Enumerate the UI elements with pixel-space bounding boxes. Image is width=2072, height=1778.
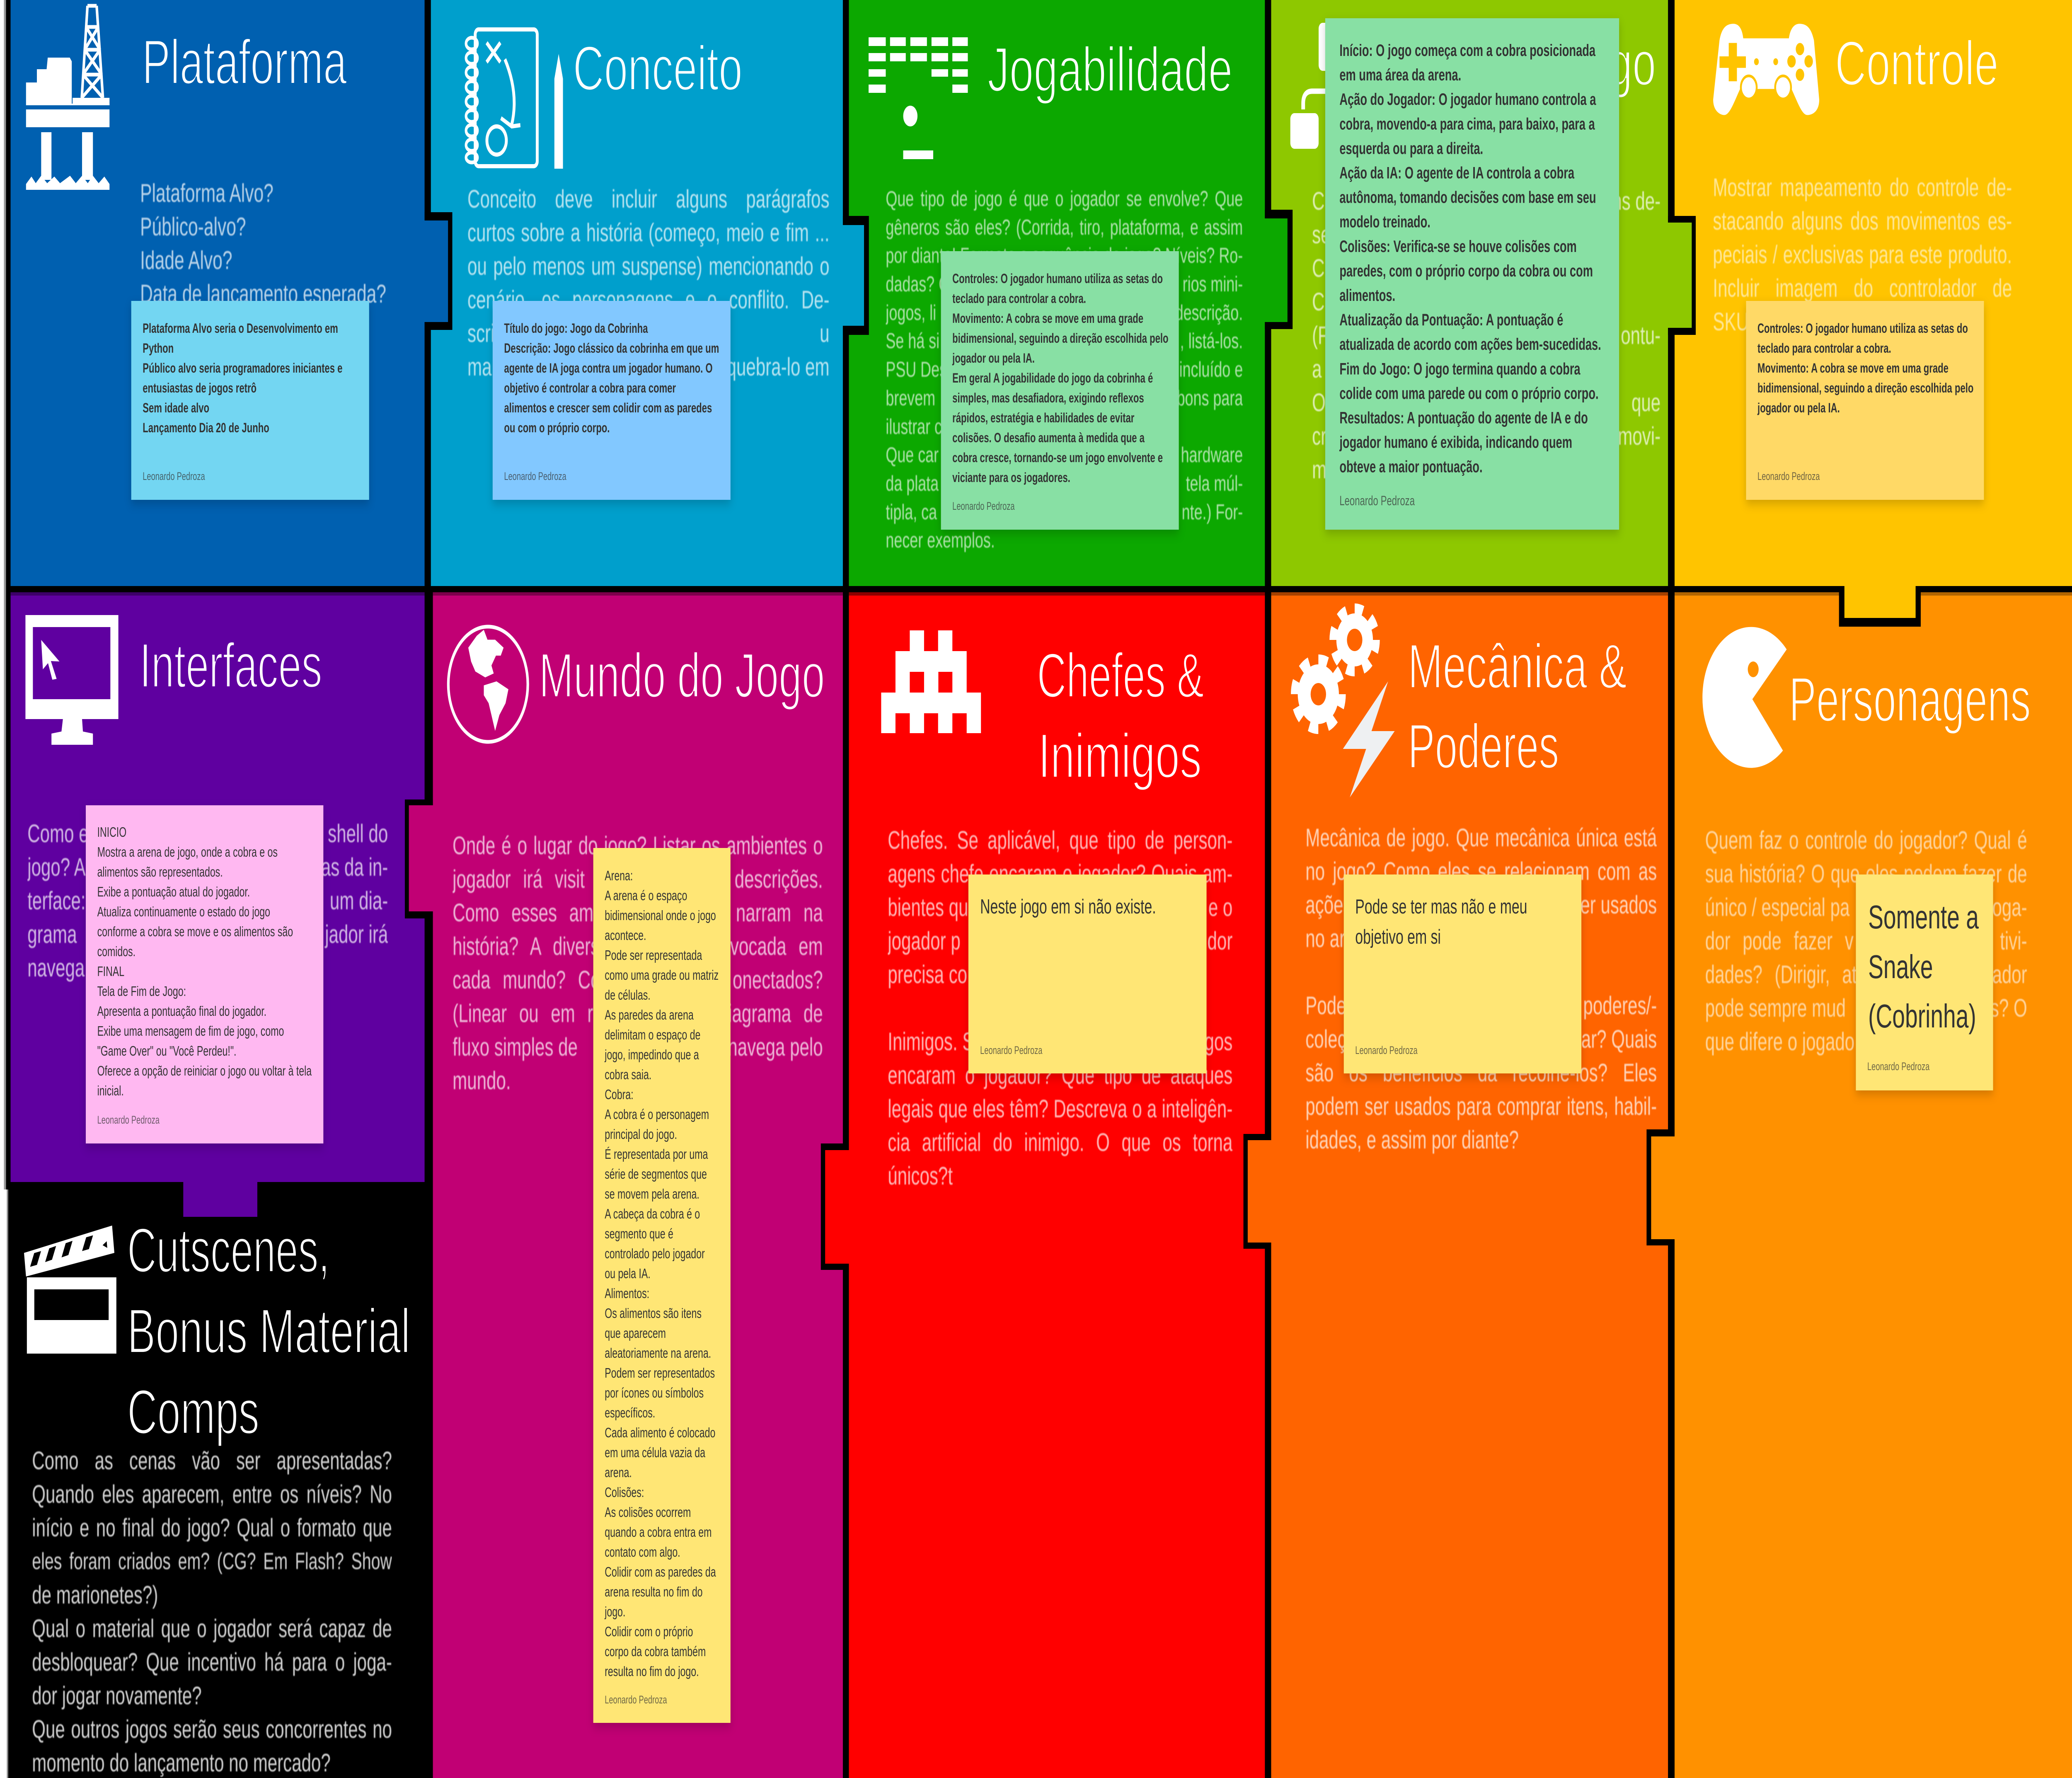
note: Fluxo do Jogo: colide com uma parede ou com o próprio corpo. <box>1339 384 1599 403</box>
note: Plataforma: entusiastas de jogos retrô <box>143 380 257 395</box>
note: Interfaces: Atualiza continuamente o estado do jogo <box>97 904 270 920</box>
text block: Chefes & Inimigos questions: gos <box>1204 1027 1232 1056</box>
text block: Controle instructions: peciais / exclusivas para este produto. <box>1713 240 2012 269</box>
text block: Mundo do Jogo questions: narram na <box>736 899 823 927</box>
text block: Personagens questions: oga- <box>1992 893 2027 921</box>
text block: Jogabilidade questions: da plata <box>886 472 939 496</box>
text block: Interfaces questions <box>27 817 388 991</box>
text block: Conceito instructions: scri <box>467 319 495 347</box>
text block: Controle instructions <box>1713 171 2012 345</box>
note: Mundo do Jogo: Podem ser representados <box>605 1366 715 1381</box>
text block: Interfaces questions: terface: <box>27 887 86 915</box>
note: Mundo do Jogo: contato com algo. <box>605 1545 680 1560</box>
text block: Conceito instructions <box>467 182 830 390</box>
text block: Chefes & Inimigos questions: Inimigos. S <box>888 1027 974 1056</box>
note: Conceito: Título do jogo: Jogo da Cobrinha <box>504 321 648 336</box>
heading: Mundo do Jogo: Mundo do Jogo <box>539 640 825 711</box>
note: Interfaces <box>86 805 323 1143</box>
note: Conceito: ou com o próprio corpo. <box>504 420 610 435</box>
note: Mundo do Jogo: aleatoriamente na arena. <box>605 1346 711 1361</box>
note: Fluxo do Jogo <box>1325 18 1619 530</box>
text block: Mecânica & Poderes questions: no ar <box>1305 924 1345 952</box>
text block: Jogabilidade questions: bons para <box>1177 386 1243 410</box>
heading: Cutscenes: Cutscenes, <box>127 1215 330 1286</box>
text block: Mecânica & Poderes questions: Mecânica de jogo. Que mecânica única está <box>1305 824 1657 852</box>
note: Mundo do Jogo: As colisões ocorrem <box>605 1505 691 1520</box>
note: Conceito: Descrição: Jogo clássico da cobrinha em que um <box>504 341 719 356</box>
panel: Cutscenes, Bonus Material, Comps <box>8 1182 433 1778</box>
text block: Interfaces questions: jador irá <box>325 920 388 948</box>
note: Mundo do Jogo: corpo da cobra também <box>605 1644 706 1659</box>
panel: Fluxo do Jogo <box>1271 0 1696 586</box>
note: Interfaces: INICIO <box>97 825 126 840</box>
text block: Cutscenes questions: Que outros jogos serão seus concorrentes no <box>32 1715 392 1743</box>
text block: Fluxo do Jogo visible fragments: a <box>1312 355 1322 383</box>
text block: Fluxo do Jogo visible fragments: m <box>1312 455 1326 484</box>
text block: Chefes & Inimigos questions: únicos?t <box>888 1162 953 1190</box>
text block: Chefes & Inimigos questions: legais que eles têm? Descreva o a inteligên- <box>888 1095 1232 1123</box>
heading: Cutscenes <box>127 1215 410 1447</box>
note: Fluxo do Jogo: Fim do Jogo: O jogo termina quando a cobra <box>1339 360 1581 378</box>
text block: Mundo do Jogo questions: descrições. <box>735 865 823 893</box>
text block: Personagens questions: s? O <box>1990 994 2027 1022</box>
note: Mundo do Jogo: Cada alimento é colocado <box>605 1425 715 1441</box>
text block: Cutscenes questions: Como as cenas vão ser apresentadas? <box>32 1446 392 1475</box>
note: Mundo do Jogo: se movem pela arena. <box>605 1187 700 1202</box>
note: Interfaces: conforme a cobra se move e os alimentos são <box>97 924 293 940</box>
text block: Jogabilidade questions: rios mini- <box>1183 272 1243 296</box>
heading: Personagens: Personagens <box>1789 664 2031 735</box>
note: Conceito: objetivo é controlar a cobra para comer <box>504 380 676 395</box>
text block: Mundo do Jogo questions: navega pelo <box>728 1033 823 1061</box>
note: Fluxo do Jogo: cobra, movendo-a para cima, para baixo, para a <box>1339 115 1595 133</box>
text block: Jogabilidade questions: nte.) For- <box>1182 500 1243 524</box>
text block: Interfaces questions: shell do <box>328 819 388 848</box>
note: Interfaces: Exibe uma mensagem de fim de jogo, como <box>97 1024 284 1039</box>
text block: Jogabilidade questions: necer exemplos. <box>886 528 995 552</box>
text block: Personagens questions: ador <box>1992 960 2027 988</box>
icon: pac-man <box>1702 627 1786 768</box>
text block: Jogabilidade questions: por diante! Formato e sequência do jogo? Níveis? Ro- <box>886 244 1243 268</box>
note: Jogabilidade: teclado para controlar a cobra. <box>952 291 1086 306</box>
text block: Controle instructions: Mostrar mapeamento do controle de- <box>1713 173 2012 201</box>
note: Jogabilidade: Controles: O jogador humano utiliza as setas do <box>952 271 1163 286</box>
note: Fluxo do Jogo: alimentos. <box>1339 286 1395 305</box>
text block: Cutscenes questions: dor jogar novamente? <box>32 1681 202 1710</box>
note: Mundo do Jogo: A arena é o espaço <box>605 888 687 904</box>
text block: Mecânica & Poderes questions: Pode <box>1305 991 1346 1020</box>
text block: Cutscenes questions: eles foram criados em? (CG? Em Flash? Show <box>32 1548 392 1575</box>
note: Jogabilidade: bidimensional, seguindo a direção escolhida pelo <box>952 331 1168 346</box>
note: Mundo do Jogo: acontece. <box>605 928 646 943</box>
text block: Jogabilidade questions: Se há si <box>886 329 939 353</box>
note: Personagens: Somente a <box>1868 899 1979 935</box>
heading: Chefes & Inimigos: Inimigos <box>1038 721 1202 791</box>
note: Conceito: agente de IA joga contra um jogador humano. O <box>504 361 713 375</box>
text block: Mundo do Jogo questions: história? A divers <box>453 932 599 960</box>
text block: Conceito instructions: ou pelo menos um suspense) mencionando o <box>467 252 830 280</box>
text block: Chefes & Inimigos questions: jogador p <box>888 927 961 955</box>
note: Mundo do Jogo: Arena: <box>605 868 633 884</box>
text block: Cutscenes questions: momento do lançamento no mercado? <box>32 1749 331 1777</box>
text block: Cutscenes questions: Qual o material que o jogador será capaz de <box>32 1614 392 1642</box>
text block: Mundo do Jogo questions: Como esses am <box>453 899 593 927</box>
text block: Jogabilidade questions: ilustrar c <box>886 414 942 438</box>
note: Controle: Movimento: A cobra se move em uma grade <box>1757 361 1949 375</box>
text block: Mecânica & Poderes questions: no jogo? Como eles se relacionam com as <box>1305 857 1657 885</box>
panel: Mundo do Jogo <box>405 592 843 1778</box>
note: Interfaces: comidos. <box>97 944 136 959</box>
text block: Plataforma questions: Data de lançamento esperada? <box>140 280 386 308</box>
panel: Conceito <box>431 0 869 586</box>
note: Mundo do Jogo: segmento que é <box>605 1226 673 1242</box>
text block: Interfaces questions: as da in- <box>321 853 388 881</box>
note: Fluxo do Jogo: modelo treinado. <box>1339 213 1431 231</box>
note: Plataforma: Sem idade alvo <box>143 400 209 415</box>
heading: Mecânica & Poderes: Poderes <box>1408 711 1559 782</box>
text block: Mecânica & Poderes questions: tar? Quais <box>1576 1025 1657 1053</box>
note: Jogabilidade: rápidos, estratégia e habilidades de evitar <box>952 410 1135 425</box>
text block: Mecânica & Poderes questions: podem ser usados para comprar itens, habil- <box>1305 1092 1657 1120</box>
text block: Cutscenes questions: início e no final do jogo? Qual o formato que <box>32 1514 392 1542</box>
panel: Personagens <box>1646 592 2072 1778</box>
heading: Chefes & Inimigos: Chefes & <box>1037 640 1204 711</box>
text block: Controle instructions: Incluir imagem do controlador de <box>1713 274 2012 302</box>
note: Mundo do Jogo: arena resulta no fim do <box>605 1584 703 1600</box>
text block: Chefes & Inimigos questions: cia artificial do inimigo. O que os torna <box>888 1128 1232 1156</box>
note: Mundo do Jogo: por ícones ou símbolos <box>605 1386 704 1401</box>
text block: Jogabilidade questions: Que tipo de jogo é que o jogador se envolve? Que <box>886 187 1243 211</box>
text block: Mundo do Jogo questions: (Linear ou em re <box>453 999 603 1027</box>
note: Fluxo do Jogo: Atualização da Pontuação: A pontuação é <box>1339 311 1563 329</box>
text block: Fluxo do Jogo visible fragments: (F <box>1312 321 1329 349</box>
note: Personagens: (Cobrinha) <box>1868 998 1976 1034</box>
note: Mecânica & Poderes: Leonardo Pedroza <box>1355 1044 1418 1056</box>
text block: Mundo do Jogo questions: onectados? <box>733 966 823 994</box>
text block: Interfaces questions: jogo? A <box>27 853 86 881</box>
text block: Personagens questions: dades? (Dirigir, at <box>1705 960 1857 988</box>
note: Mundo do Jogo: de células. <box>605 988 651 1003</box>
note: Controle: Controles: O jogador humano utiliza as setas do <box>1757 321 1968 336</box>
text block: Fluxo do Jogo visible fragments: ns de- <box>1612 187 1661 215</box>
note: Interfaces: alimentos são representados. <box>97 865 223 880</box>
icon: gears and lightning bolt <box>1295 609 1395 797</box>
text block: Jogabilidade questions: descrição. <box>1175 301 1243 325</box>
note: Fluxo do Jogo: Início: O jogo começa com a cobra posicionada <box>1339 41 1596 60</box>
text block: Personagens questions: único / especial pa <box>1705 893 1849 921</box>
text block: Chefes & Inimigos questions: e o <box>1208 893 1232 921</box>
note: Mundo do Jogo: jogo. <box>604 1604 625 1620</box>
text block: Plataforma questions <box>140 177 414 317</box>
note: Mundo do Jogo: resulta no fim do jogo. <box>605 1664 699 1679</box>
text block: Mecânica & Poderes questions: são os benefícios da recolhê-los? Eles <box>1305 1059 1657 1087</box>
note: Fluxo do Jogo: jogador humano é exibida, indicando quem <box>1339 434 1572 452</box>
text block: Plataforma questions: Plataforma Alvo? <box>140 179 274 208</box>
heading: Controle: Controle <box>1835 28 1999 99</box>
note: Chefes & Inimigos: Neste jogo em si não existe. <box>980 895 1156 918</box>
text block: Jogabilidade questions: incluído e <box>1179 358 1243 382</box>
panel: Plataforma <box>11 0 452 586</box>
text block: Personagens questions: Quem faz o controle do jogador? Qual é <box>1705 826 2027 854</box>
heading: Cutscenes: Bonus Material <box>127 1296 410 1366</box>
panel: Controle <box>1675 0 2072 627</box>
note: Mundo do Jogo: Leonardo Pedroza <box>605 1693 667 1706</box>
text block: Mecânica & Poderes questions <box>1305 821 1657 1161</box>
icon: monitor with cursor <box>25 615 119 745</box>
note: Mecânica & Poderes: objetivo em si <box>1355 925 1441 948</box>
text block: Jogabilidade questions <box>886 185 1243 558</box>
text block: Mundo do Jogo questions: vocada em <box>730 932 823 960</box>
text block: Jogabilidade questions: brevem <box>886 386 935 410</box>
note: Controle: teclado para controlar a cobra. <box>1757 341 1891 356</box>
note: Conceito <box>493 301 731 500</box>
note: Plataforma: Lançamento Dia 20 de Junho <box>143 420 269 435</box>
text block: Mundo do Jogo questions: cada mundo? Co <box>453 966 600 994</box>
note: Mundo do Jogo: Colidir com as paredes da <box>605 1565 716 1580</box>
text block: Jogabilidade questions: dadas? C <box>886 272 949 296</box>
panel: Interfaces <box>11 592 425 1217</box>
note: Interfaces: "Game Over" ou "Você Perdeu!". <box>97 1044 236 1059</box>
note: Fluxo do Jogo: esquerda ou para a direita. <box>1339 139 1483 158</box>
icon: clapperboard <box>24 1226 116 1354</box>
note: Mundo do Jogo: delimitam o espaço de <box>605 1027 700 1043</box>
note: Mecânica & Poderes <box>1344 874 1581 1073</box>
note: Jogabilidade: Movimento: A cobra se move em uma grade <box>952 311 1143 326</box>
text block: Personagens questions: pode sempre mud <box>1705 994 1846 1022</box>
panel: Chefes & Inimigos <box>821 592 1265 1778</box>
text block: Mecânica & Poderes questions: coleç <box>1305 1025 1346 1053</box>
text block: Interfaces questions: Como e <box>27 819 89 848</box>
note: Mundo do Jogo: É representada por uma <box>605 1146 708 1162</box>
note: Plataforma: Público alvo seria programadores iniciantes e <box>143 361 342 375</box>
text block: Controle instructions: SKU <box>1713 308 1749 336</box>
text block: Fluxo do Jogo visible fragments: cr <box>1312 422 1326 450</box>
text block: Personagens questions: tivi- <box>2000 927 2027 955</box>
note: Personagens <box>1856 874 1993 1090</box>
text block: Fluxo do Jogo visible fragments: C <box>1312 187 1325 215</box>
note: Mundo do Jogo: Pode ser representada <box>605 948 702 963</box>
note: Mundo do Jogo: jogo, impedindo que a <box>604 1047 699 1063</box>
note: Mundo do Jogo: série de segmentos que <box>605 1167 707 1182</box>
note: Interfaces: Mostra a arena de jogo, onde a cobra e os <box>97 845 278 860</box>
text block: Jogabilidade questions: Que car <box>886 443 939 467</box>
note: Fluxo do Jogo: em uma área da arena. <box>1339 66 1461 84</box>
note: Plataforma: Python <box>143 341 174 356</box>
text block: Interfaces questions: navega <box>27 954 85 982</box>
note: Chefes & Inimigos <box>968 874 1207 1073</box>
text block: Conceito instructions: ma <box>467 353 492 381</box>
note: Mundo do Jogo: A cobra é o personagem <box>605 1107 709 1122</box>
icon: game controller <box>1713 24 1819 115</box>
note: Mundo do Jogo: principal do jogo. <box>605 1127 677 1142</box>
text block: Chefes & Inimigos questions: agens chefe encaram o jogador? Quais am- <box>888 860 1232 888</box>
text block: Conceito instructions: u <box>820 319 830 347</box>
note: Interfaces: Oferece a opção de reiniciar o jogo ou voltar à tela <box>97 1063 312 1079</box>
note: Mundo do Jogo: A cabeça da cobra é o <box>605 1206 700 1222</box>
text block: Plataforma questions: Público-alvo? <box>140 213 246 241</box>
note: Jogabilidade: simples, mas desafiadora, exigindo reflexos <box>952 390 1144 405</box>
panel: Mecânica & Poderes <box>1244 592 1668 1778</box>
text block: Mecânica & Poderes questions: idades, e assim por diante? <box>1305 1126 1519 1154</box>
heading: Chefes & Inimigos <box>1037 640 1204 791</box>
note: Mundo do Jogo: Cobra: <box>605 1087 634 1102</box>
note: Personagens: Leonardo Pedroza <box>1867 1060 1930 1073</box>
text block: Cutscenes questions: Quando eles aparecem, entre os níveis? No <box>32 1480 392 1508</box>
text block: Personagens questions: que difere o jogado <box>1705 1027 1854 1056</box>
note: Mundo do Jogo: ou pela IA. <box>605 1266 651 1281</box>
note: Fluxo do Jogo: atualizada de acordo com ações bem-sucedidas. <box>1339 335 1601 354</box>
icon: playbook and pencil <box>466 29 563 169</box>
text block: Jogabilidade questions: PSU Des <box>886 358 947 382</box>
note: Conceito: Leonardo Pedroza <box>504 470 566 482</box>
text block: Jogabilidade questions: jogos, li <box>886 301 936 325</box>
text block: Personagens questions: dor pode fazer v <box>1705 927 1854 955</box>
note: Plataforma: Leonardo Pedroza <box>143 470 205 482</box>
text block: Fluxo do Jogo visible fragments: C <box>1312 288 1325 316</box>
note: Chefes & Inimigos: Leonardo Pedroza <box>980 1044 1043 1056</box>
note: Fluxo do Jogo: Ação da IA: O agente de IA controla a cobra <box>1339 164 1575 182</box>
text block: Chefes & Inimigos questions <box>888 824 1232 1197</box>
note: Mundo do Jogo: arena. <box>605 1465 632 1480</box>
text block: Cutscenes questions: desbloquear? Que incentivo há para o joga- <box>32 1648 392 1676</box>
text block: Jogabilidade questions: gêneros são eles? (Corrida, tiro, plataforma, e assim <box>886 216 1243 240</box>
text block: Chefes & Inimigos questions: Chefes. Se aplicável, que tipo de person- <box>888 826 1232 854</box>
text block: Mundo do Jogo questions: mundo. <box>453 1066 511 1095</box>
note: Controle <box>1746 301 1984 500</box>
note: Controle: Leonardo Pedroza <box>1757 470 1820 482</box>
note: Personagens: Snake <box>1868 948 1933 985</box>
note: Interfaces: Exibe a pontuação atual do jogador. <box>97 884 250 900</box>
text block: Interfaces questions: um dia- <box>330 887 388 915</box>
icon: space invader <box>881 630 981 733</box>
icon: flow diagram blocks <box>1290 23 1330 149</box>
heading: Interfaces: Interfaces <box>140 630 322 701</box>
text block: Mundo do Jogo questions: iagrama de <box>728 999 823 1027</box>
text block: Conceito instructions: Conceito deve incluir alguns parágrafos <box>467 185 830 213</box>
icon: globe <box>448 627 528 742</box>
text block: Jogabilidade questions: hardware <box>1181 443 1243 467</box>
heading: Conceito: Conceito <box>573 33 743 104</box>
text block: Chefes & Inimigos questions: precisa co <box>888 960 967 988</box>
note: Mundo do Jogo <box>593 848 731 1723</box>
note: Controle: bidimensional, seguindo a direção escolhida pelo <box>1757 380 1973 395</box>
note: Jogabilidade: jogador ou pela IA. <box>952 351 1035 366</box>
text block: Mecânica & Poderes questions: poderes/- <box>1583 991 1657 1020</box>
icon: brick breaker game <box>869 37 968 159</box>
text block: Mundo do Jogo questions: fluxo simples de <box>453 1033 578 1061</box>
note: Fluxo do Jogo: obteve a maior pontuação. <box>1339 458 1483 476</box>
note: Mundo do Jogo: específicos. <box>605 1405 655 1421</box>
text block: Cutscenes questions: de marionetes?) <box>32 1581 158 1609</box>
text block: Mundo do Jogo questions: Onde é o lugar do jogo? Listar os ambientes o <box>453 831 823 860</box>
heading: Mecânica & Poderes: Mecânica & <box>1408 631 1627 702</box>
text block: Fluxo do Jogo visible fragments <box>1312 184 1661 499</box>
text block: Chefes & Inimigos questions: dor <box>1208 927 1232 955</box>
note: Jogabilidade <box>941 251 1179 530</box>
text block: Personagens questions: sua história? O que eles podem fazer de <box>1705 860 2027 888</box>
text block: Jogabilidade questions: tipla, ca <box>886 500 937 524</box>
text block: Mundo do Jogo questions: jogador irá visit <box>453 865 585 893</box>
note: Interfaces: FINAL <box>97 964 124 979</box>
text block: Mecânica & Poderes questions: er usados <box>1580 891 1657 919</box>
note: Fluxo do Jogo: Resultados: A pontuação do agente de IA e do <box>1339 409 1588 427</box>
note: Fluxo do Jogo: Colisões: Verifica-se se houve colisões com <box>1339 237 1577 256</box>
heading: Cutscenes: Comps <box>127 1377 259 1447</box>
note: Mundo do Jogo: Os alimentos são itens <box>605 1306 702 1321</box>
note: Mundo do Jogo: Alimentos: <box>605 1286 649 1301</box>
text block: Jogabilidade questions: , listá-los. <box>1180 329 1243 353</box>
text block: Fluxo do Jogo visible fragments: C <box>1312 254 1325 282</box>
note: Mundo do Jogo: em uma célula vazia da <box>605 1445 705 1461</box>
heading: Jogabilidade: Jogabilidade <box>988 34 1232 105</box>
text block: Conceito instructions: quebra-lo em <box>727 353 830 381</box>
text block: Chefes & Inimigos questions: bientes qu <box>888 893 968 921</box>
note: Mundo do Jogo: quando a cobra entra em <box>605 1525 712 1540</box>
note: Fluxo do Jogo: paredes, com o próprio corpo da cobra ou com <box>1339 262 1593 280</box>
text block: Fluxo do Jogo visible fragments: que <box>1631 388 1661 417</box>
text block: Conceito instructions: cenário, os personagens e o conflito. De- <box>467 286 830 314</box>
note: Controle: jogador ou pela IA. <box>1757 400 1840 415</box>
note: Mundo do Jogo: As paredes da arena <box>605 1008 694 1023</box>
text block: Fluxo do Jogo visible fragments: movi- <box>1618 422 1661 450</box>
text block: Conceito instructions: curtos sobre a história (começo, meio e fim ... <box>467 218 830 247</box>
note: Interfaces: Leonardo Pedroza <box>97 1114 160 1126</box>
note: Fluxo do Jogo: Ação do Jogador: O jogador humano controla a <box>1339 90 1596 109</box>
text block: Chefes & Inimigos questions: encaram o jogador? Que tipo de ataques <box>888 1061 1232 1089</box>
note: Plataforma <box>131 301 369 500</box>
text block: Personagens questions <box>1705 824 2027 1064</box>
panel: Jogabilidade <box>849 0 1293 586</box>
text block: Fluxo do Jogo visible fragments: O <box>1312 388 1326 417</box>
text block: Cutscenes questions <box>32 1444 392 1778</box>
note: Mundo do Jogo: como uma grade ou matriz <box>605 968 719 983</box>
note: Jogabilidade: viciante para os jogadores. <box>952 470 1070 485</box>
note: Mundo do Jogo: que aparecem <box>605 1326 666 1341</box>
note: Jogabilidade: colisões. O desafio aumenta à medida que a <box>952 430 1145 445</box>
note: Plataforma: Plataforma Alvo seria o Desenvolvimento em <box>143 321 338 336</box>
note: Mundo do Jogo: cobra saia. <box>605 1067 651 1083</box>
text block: Fluxo do Jogo visible fragments: se <box>1312 220 1331 249</box>
note: Mecânica & Poderes: Pode se ter mas não e meu <box>1355 895 1527 918</box>
text block: Fluxo do Jogo visible fragments: ontu- <box>1621 321 1661 349</box>
note: Interfaces: inicial. <box>97 1083 124 1099</box>
icon: oil platform <box>26 6 109 190</box>
heading: Mecânica & Poderes <box>1408 631 1627 782</box>
heading: Fluxo do Jogo: Fluxo do Jogo <box>1389 28 1656 99</box>
note: Interfaces: Tela de Fim de Jogo: <box>97 984 186 999</box>
note: Mundo do Jogo: controlado pelo jogador <box>605 1246 705 1262</box>
text block: Jogabilidade questions: tela múl- <box>1186 472 1243 496</box>
note: Conceito: alimentos e crescer sem colidir com as paredes <box>504 400 712 415</box>
text block: Interfaces questions: grama <box>27 920 77 948</box>
note: Interfaces: Apresenta a pontuação final do jogador. <box>97 1004 266 1019</box>
note: Jogabilidade: Em geral A jogabilidade do jogo da cobrinha é <box>952 371 1153 385</box>
note: Mundo do Jogo: Colidir com o próprio <box>605 1624 693 1640</box>
text block: Controle instructions: stacando alguns dos movimentos es- <box>1713 207 2012 235</box>
text block: Plataforma questions: Idade Alvo? <box>140 246 232 275</box>
heading: Plataforma: Plataforma <box>142 27 347 97</box>
note: Fluxo do Jogo: Leonardo Pedroza <box>1339 493 1415 508</box>
note: Mundo do Jogo: Colisões: <box>605 1485 644 1500</box>
note: Fluxo do Jogo: autônoma, tomando decisões com base em seu <box>1339 189 1596 207</box>
note: Jogabilidade: Leonardo Pedroza <box>952 500 1015 512</box>
text block: Mecânica & Poderes questions: ações <box>1305 891 1352 919</box>
text block: Mundo do Jogo questions <box>453 829 823 1102</box>
note: Jogabilidade: cobra cresce, tornando-se um jogo envolvente e <box>952 450 1163 465</box>
note: Mundo do Jogo: bidimensional onde o jogo <box>605 908 716 923</box>
